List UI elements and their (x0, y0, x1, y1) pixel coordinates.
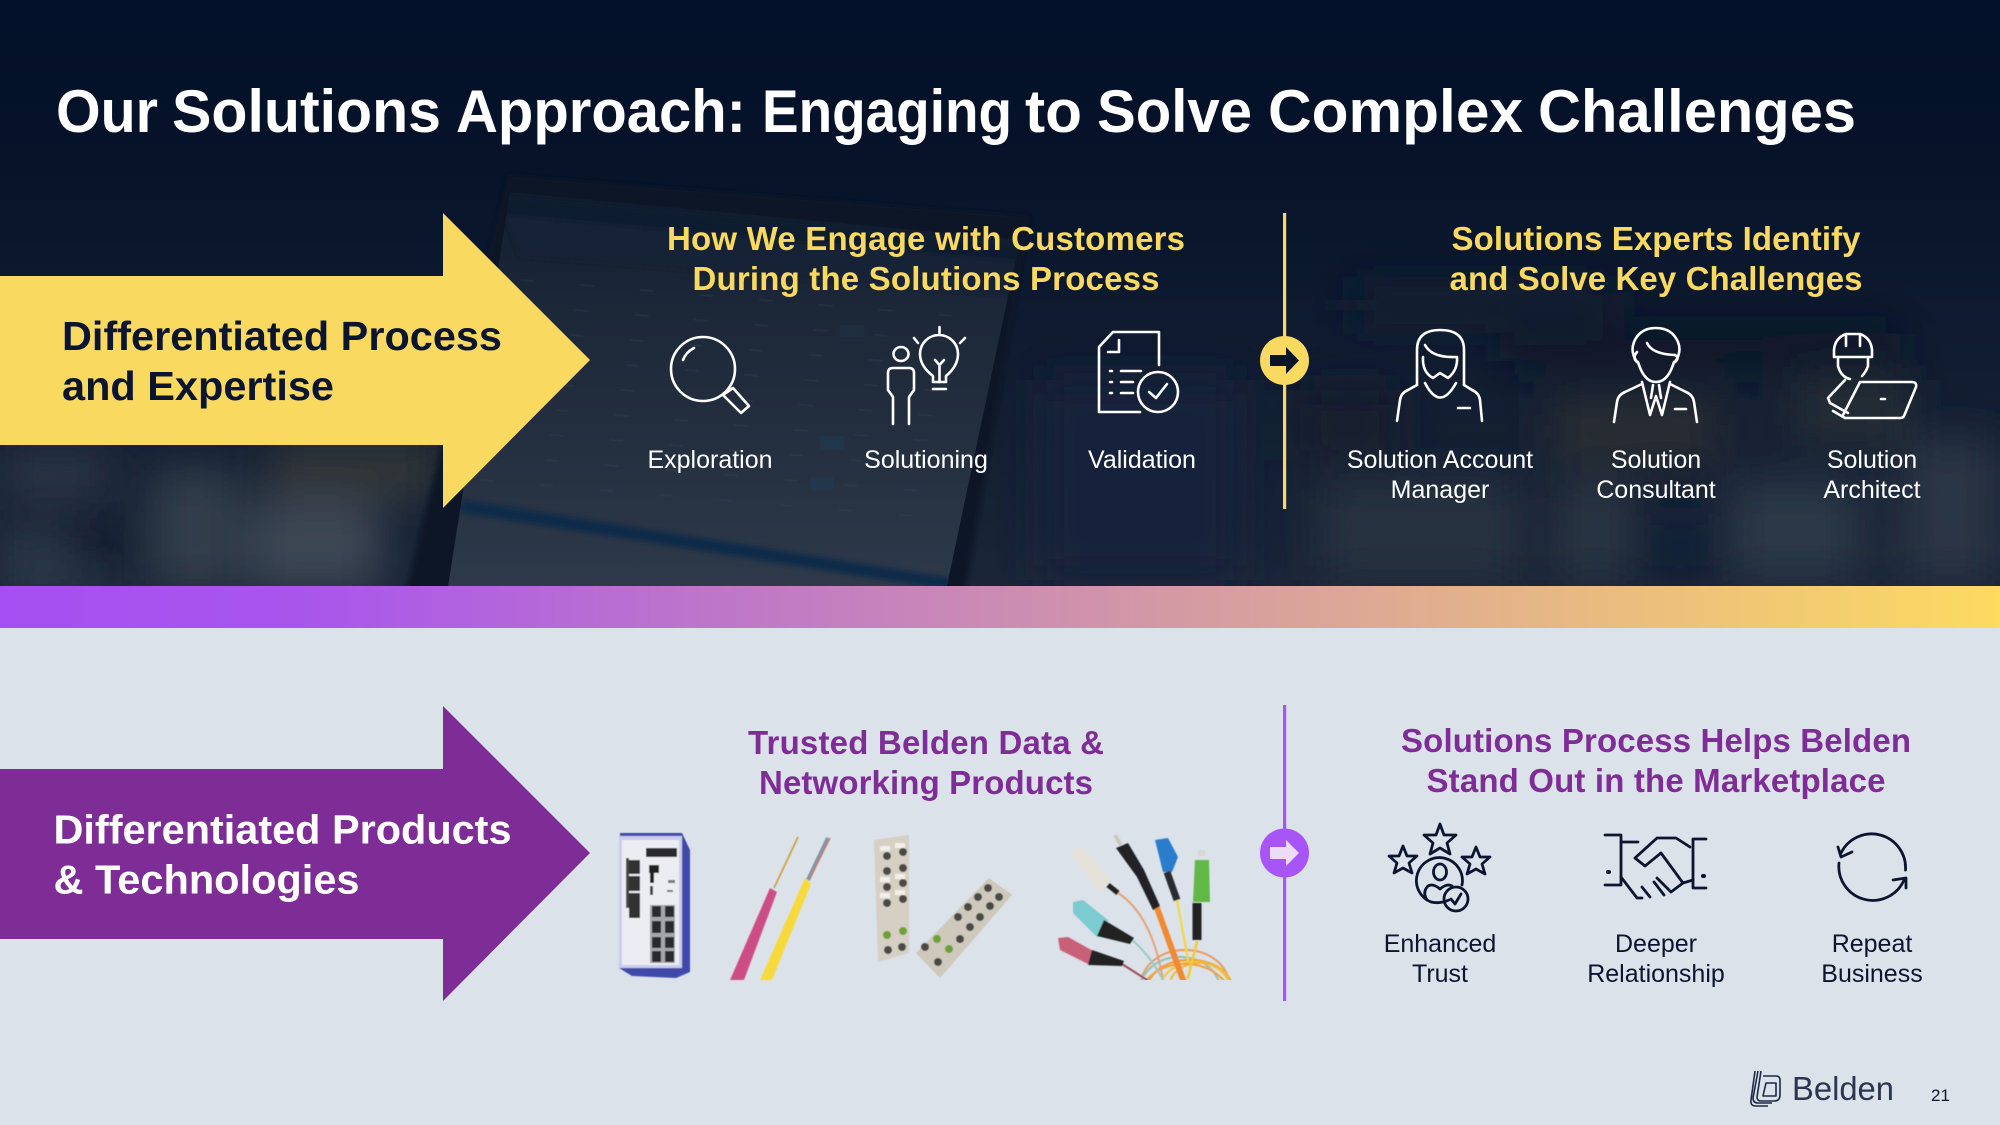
exploration item (647, 337, 773, 474)
deeper relationship item (1587, 835, 1725, 988)
enhanced trust item (1384, 824, 1496, 988)
solution architect item (1823, 334, 1921, 504)
laptop frame (406, 290, 1014, 586)
icon: engineer with laptop (1828, 334, 1916, 418)
icon: handshake (1605, 835, 1706, 898)
solution consultant item: Consultant (1596, 476, 1716, 504)
heading: solutions process helps (1401, 722, 1911, 799)
gradient band (0, 586, 2000, 628)
title: Our (56, 78, 158, 145)
title: Engaging (762, 78, 1012, 145)
icon: woman (1397, 330, 1482, 421)
solution consultant item (1596, 328, 1716, 504)
heading: solutions experts: and Solve Key Challenges (1450, 260, 1862, 297)
heading: trusted belden products: Trusted Belden Data & (748, 724, 1104, 761)
purple arrow: differentiated products and technologies: Differentiated Products (54, 806, 512, 852)
validation item (1088, 332, 1196, 474)
product: fiber connectors (1058, 834, 1232, 980)
solution consultant item: Solution (1611, 446, 1701, 474)
title: Challenges (1538, 78, 1856, 145)
title (56, 78, 1856, 145)
heading: solutions process helps: Stand Out in the Marketplace (1426, 762, 1886, 799)
background: dark blurred photo panel (0, 0, 2000, 586)
divider with purple arrow badge (1260, 705, 1309, 1001)
yellow arrow: differentiated process and expertise: Differentiated Process (62, 313, 502, 359)
heading: trusted belden products (748, 724, 1104, 801)
yellow arrow: differentiated process and expertise (0, 213, 590, 508)
enhanced trust item: Trust (1412, 960, 1468, 988)
title: Solve (1097, 78, 1252, 145)
title: Solutions (172, 78, 441, 145)
validation item: Validation (1088, 446, 1196, 474)
heading: solutions process helps: Solutions Process Helps Belden (1401, 722, 1911, 759)
purple arrow: differentiated products and technologies (0, 706, 590, 1001)
deeper relationship item: Deeper (1615, 930, 1697, 958)
yellow arrow: differentiated process and expertise: and Expertise (62, 363, 334, 409)
laptop screen (448, 192, 1020, 586)
title: Approach: (456, 78, 746, 145)
solutioning item (864, 327, 988, 474)
icon: person with light bulb (888, 327, 965, 424)
exploration item: Exploration (647, 446, 773, 474)
solution architect item: Solution (1827, 446, 1917, 474)
repeat business item: Repeat (1832, 930, 1912, 958)
heading: trusted belden products: Networking Products (759, 764, 1093, 801)
solution architect item: Architect (1823, 476, 1921, 504)
product: industrial ethernet switch (619, 833, 690, 978)
icon: stars and person badge (1389, 824, 1490, 911)
icon: man in suit (1614, 328, 1697, 422)
enhanced trust item: Enhanced (1384, 930, 1496, 958)
repeat business item (1821, 834, 1923, 988)
repeat business item: Business (1821, 960, 1923, 988)
deeper relationship item: Relationship (1587, 960, 1725, 988)
heading: solutions experts: Solutions Experts Identify (1452, 220, 1861, 257)
solutioning item: Solutioning (864, 446, 988, 474)
solution account manager item (1347, 330, 1533, 504)
heading: how we engage: During the Solutions Process (692, 260, 1160, 297)
purple arrow: differentiated products and technologies: & Technologies (54, 856, 360, 902)
solution account manager item: Solution Account (1347, 446, 1533, 474)
solution account manager item: Manager (1391, 476, 1489, 504)
logo: Belden: Belden (1792, 1070, 1894, 1107)
icon: logo mark (1751, 1071, 1780, 1106)
icon: circular arrows (1838, 834, 1906, 900)
divider with yellow arrow badge (1260, 213, 1309, 509)
heading: how we engage: How We Engage with Customers (667, 220, 1185, 257)
product: fiber cables (730, 837, 830, 980)
heading: solutions experts (1450, 220, 1862, 297)
title: Complex (1268, 78, 1523, 145)
page number: 21 (1931, 1086, 1950, 1105)
product: I/O modules (874, 835, 1012, 978)
title: to (1025, 78, 1082, 145)
heading: how we engage (667, 220, 1185, 297)
icon: magnifier (671, 337, 749, 413)
icon: document with check (1099, 332, 1178, 412)
